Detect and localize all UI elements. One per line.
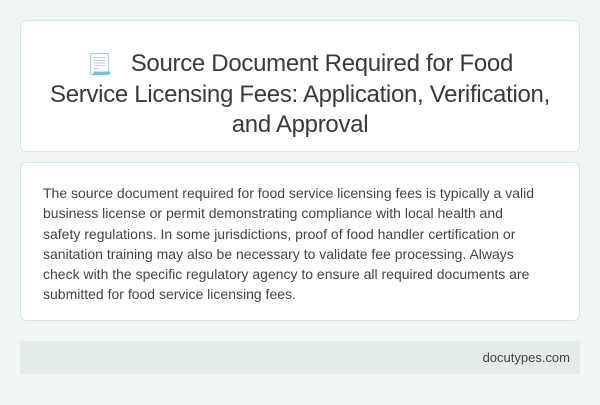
footer: docutypes.com: [483, 350, 570, 365]
text block: submitted for food service licensing fees.: [43, 286, 296, 302]
title: 📃 Source Document Required for Food: [87, 50, 513, 77]
text block: check with the specific regulatory agency to ensure all required documents are: [43, 266, 529, 282]
footer: [20, 341, 580, 374]
text block: safety regulations. In some jurisdictions, proof of food handler certification or: [43, 226, 515, 242]
text block: [43, 185, 534, 302]
text block: The source document required for food service licensing fees is typically a valid: [43, 185, 534, 201]
text block: business license or permit demonstrating compliance with local health and: [43, 205, 503, 221]
panel: title card: [20, 20, 580, 152]
panel: description: [20, 162, 580, 321]
text block: sanitation training may also be necessary to validate fee processing. Always: [43, 246, 514, 262]
title: and Approval: [232, 111, 368, 138]
title: Service Licensing Fees: Application, Verification,: [50, 81, 550, 108]
title: [50, 50, 550, 138]
